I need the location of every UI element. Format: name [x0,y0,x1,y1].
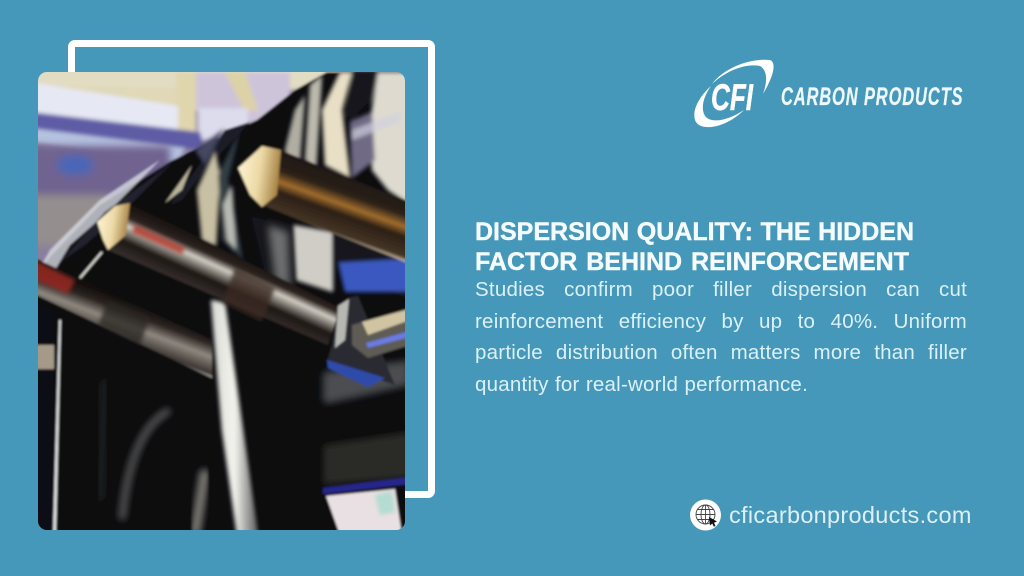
body text: Studies confirm poor filler dispersion can cut [475,278,967,301]
heading [475,218,914,276]
lower left sheet [53,320,222,535]
left lower roller [30,256,212,378]
roller end bracket [327,296,395,385]
logo: CFI Carbon Products [694,60,963,128]
central vertical band [230,308,331,530]
heading: DISPERSION QUALITY: THE HIDDEN [475,218,914,246]
heading: FACTOR BEHIND REINFORCEMENT [475,248,909,276]
icon: globe with cursor [690,500,721,530]
photo: carbon-black rubber sheet on steel rollers [38,72,405,530]
logo wordmark: CARBON PRODUCTS [781,84,963,111]
main middle roller [108,203,340,345]
website url: cficarbonproducts.com [729,502,972,528]
black rubber sheet [30,72,410,535]
website link [690,500,972,530]
decorative white frame [68,40,435,498]
logo swoosh [694,60,774,127]
logo mark text: CFI [711,77,754,118]
background blur [30,64,340,162]
body text [475,278,967,396]
sheet highlights upper [197,72,410,260]
right lower dark machinery [323,350,405,520]
upper right roller [262,150,410,264]
body text: particle distribution often matters more than filler [475,341,967,364]
body text: quantity for real-world performance. [475,373,808,396]
body text: reinforcement efficiency by up to 40%. Uniform [475,310,967,332]
